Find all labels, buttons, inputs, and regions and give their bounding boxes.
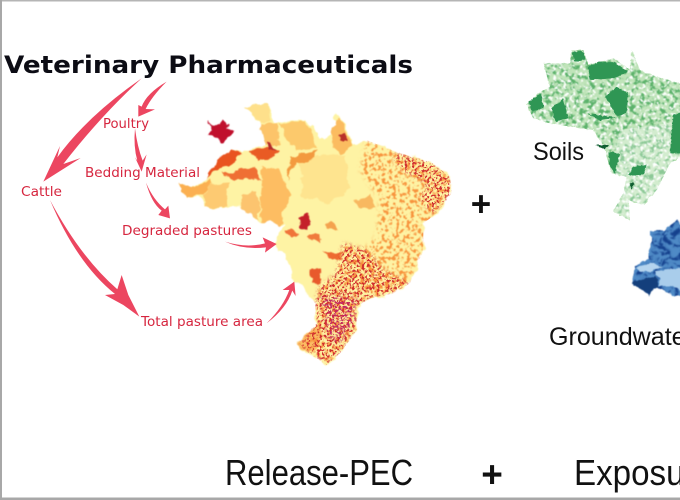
map: soils bbox=[520, 40, 680, 220]
map base and regional fills bbox=[180, 105, 452, 365]
soils base bbox=[527, 50, 680, 220]
arrow: total pasture area to map bbox=[267, 282, 296, 323]
footer: release-PEC: Release-PEC bbox=[225, 452, 413, 493]
plus sign: map: + bbox=[471, 185, 491, 224]
arrow: title to cattle bbox=[43, 78, 142, 182]
map: south purple speckle bbox=[318, 293, 360, 346]
source labels bbox=[21, 116, 263, 330]
arrow: cattle to total pasture area bbox=[50, 200, 139, 317]
label: total pasture area: Total pasture area bbox=[140, 314, 263, 330]
title: Veterinary Pharmaceuticals bbox=[4, 51, 413, 79]
arrow: degraded pastures to map bbox=[225, 237, 277, 253]
groundwater base bbox=[631, 218, 680, 297]
soils speckle bbox=[520, 40, 680, 220]
arrow: poultry to bedding material bbox=[134, 128, 147, 172]
soils dark patches bbox=[528, 52, 680, 189]
label: bedding material: Bedding Material bbox=[85, 165, 200, 181]
map: groundwater bbox=[631, 218, 680, 297]
label: soils: Soils bbox=[533, 138, 584, 166]
label: cattle: Cattle bbox=[21, 184, 62, 200]
map: north east speckle bbox=[350, 140, 452, 298]
label: degraded pastures: Degraded pastures bbox=[122, 223, 252, 239]
label: poultry: Poultry bbox=[103, 116, 149, 132]
arrow: bedding material to degraded pastures bbox=[146, 183, 170, 218]
map: release of veterinary pharmaceuticals in Brazil bbox=[180, 105, 460, 375]
map: north east coast speckle bbox=[392, 152, 452, 216]
arrows bbox=[43, 78, 296, 323]
map: isolated dark red region bbox=[207, 119, 234, 144]
footer: plus sign: + bbox=[481, 454, 503, 495]
arrow: title to poultry bbox=[138, 82, 167, 117]
map: south east speckle bbox=[298, 240, 411, 365]
